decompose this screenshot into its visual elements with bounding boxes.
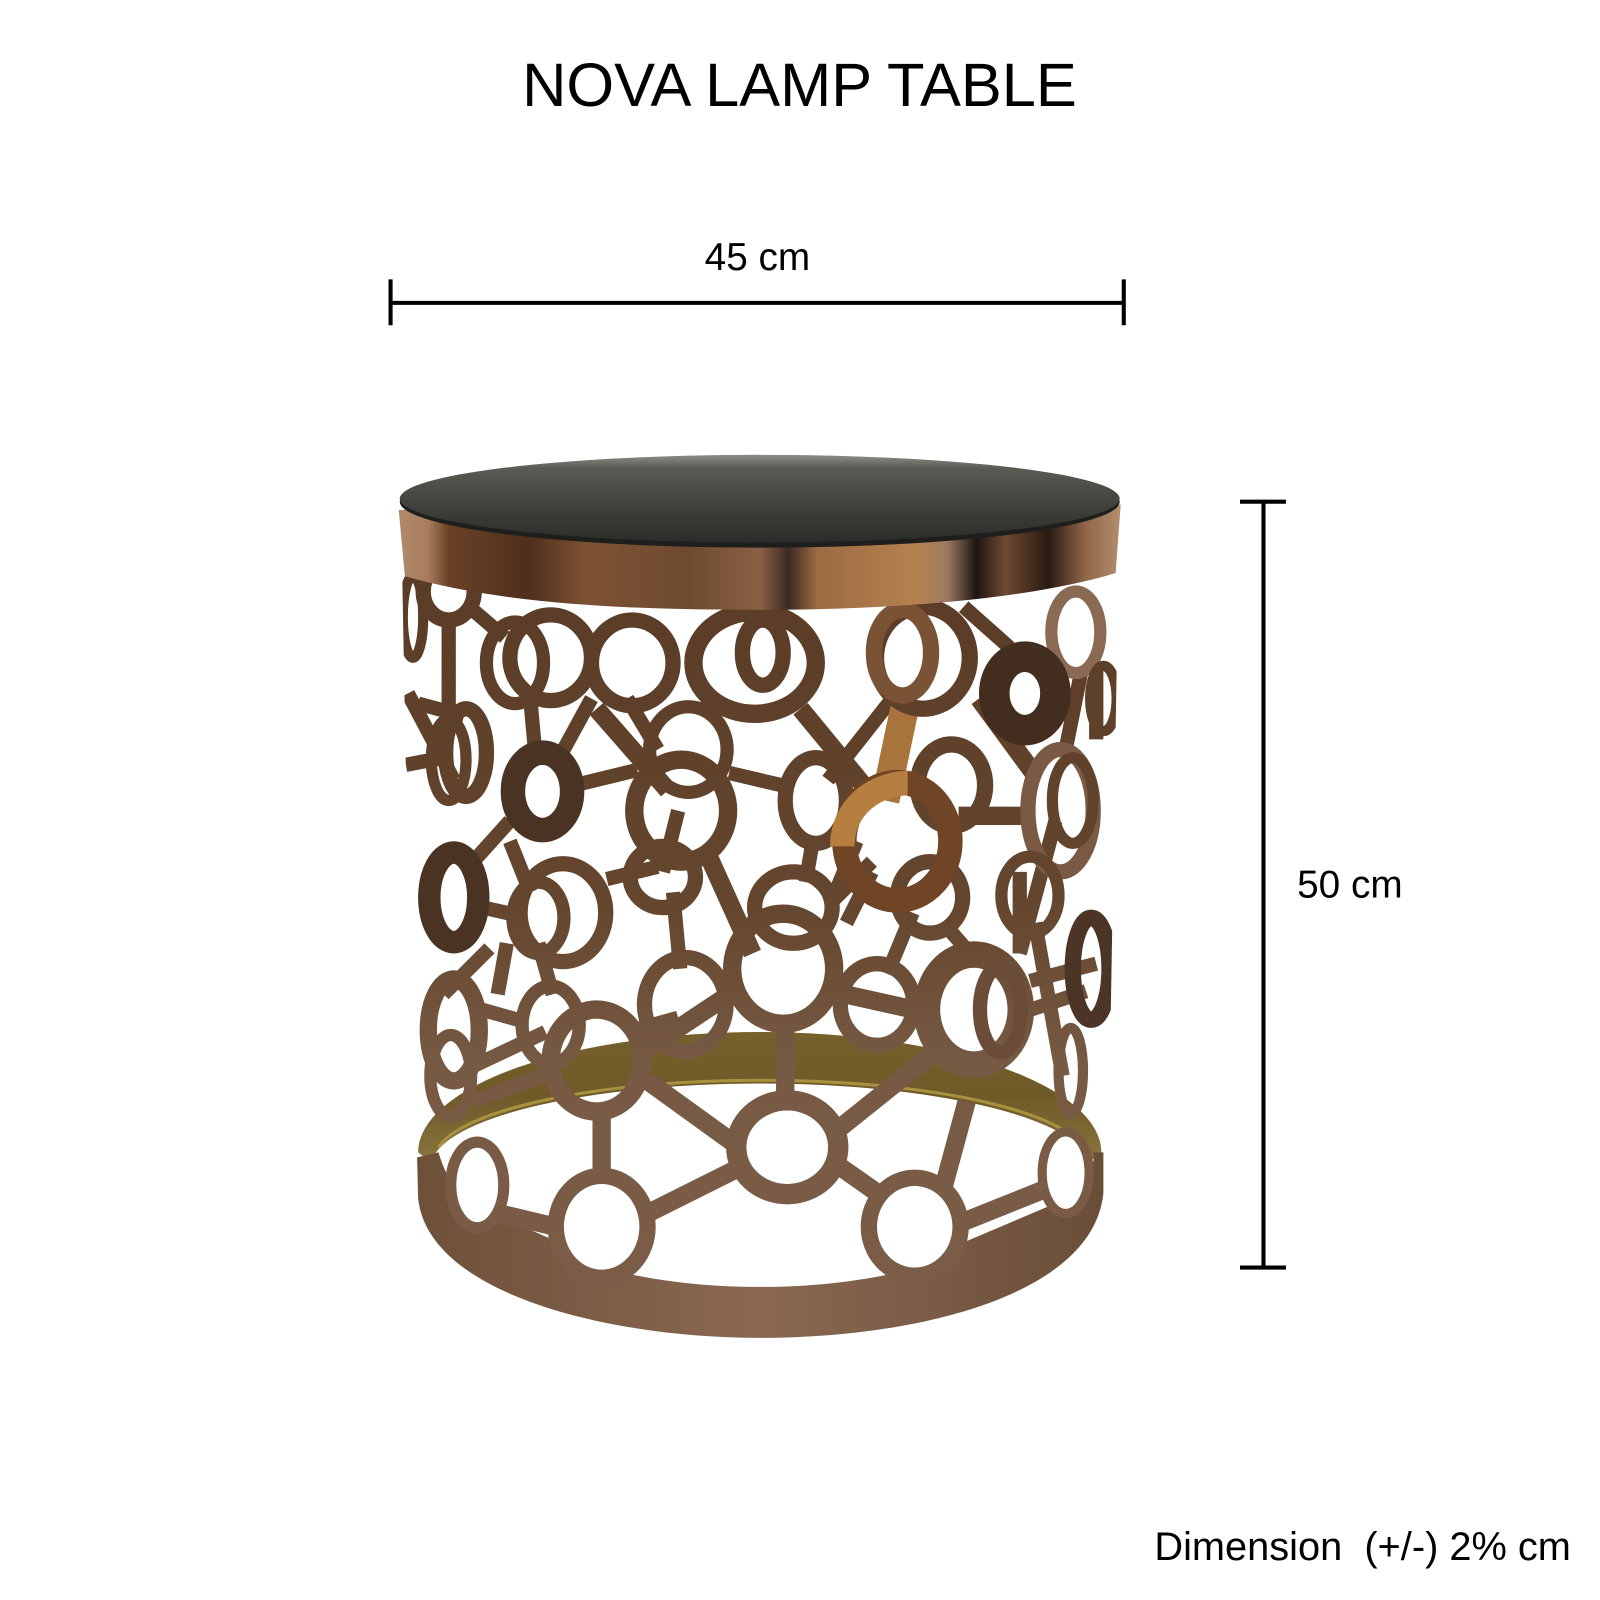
height arrow	[1240, 502, 1286, 1268]
bottom band	[417, 1152, 1103, 1338]
title: NOVA LAMP TABLE	[522, 51, 1077, 119]
product: Nova lamp table	[399, 455, 1121, 1338]
top rim band	[399, 505, 1121, 610]
height label: 50 cm	[1297, 863, 1403, 906]
width dimension: 45 cm	[391, 236, 1124, 325]
lattice rings	[403, 563, 1117, 1278]
lattice connectors	[406, 607, 1096, 1227]
heavy dark rings	[429, 657, 1055, 942]
height dimension: 50 cm	[1240, 502, 1403, 1268]
tolerance note: Dimension (+/-) 2% cm	[1154, 1525, 1571, 1569]
glass table top	[400, 455, 1120, 548]
width label: 45 cm	[705, 236, 810, 279]
inner gold base ring	[418, 1032, 1101, 1163]
width arrow	[391, 279, 1124, 325]
